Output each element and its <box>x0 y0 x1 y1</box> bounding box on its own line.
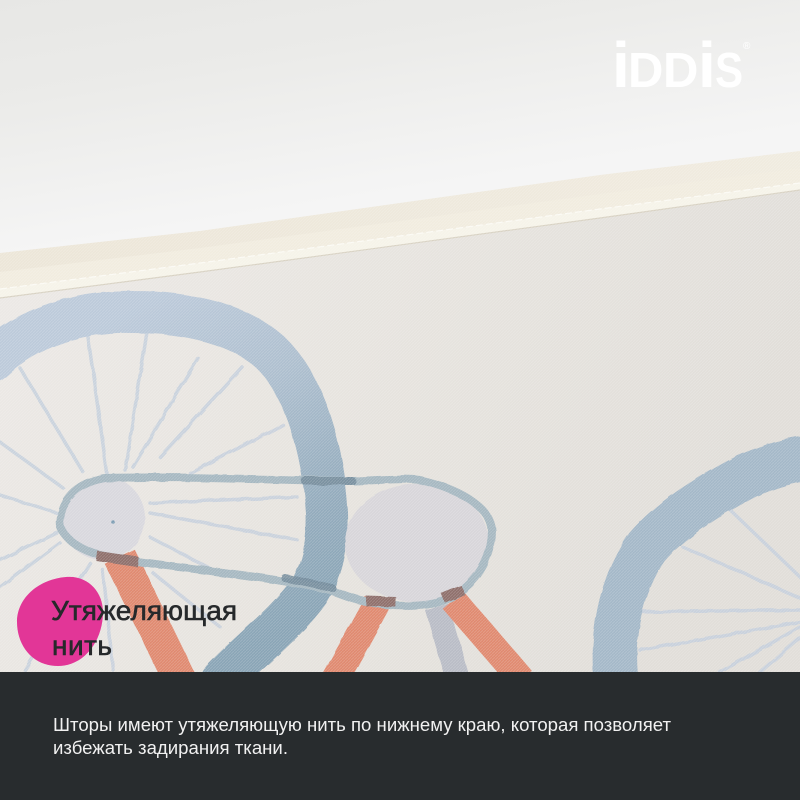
curtain hem <box>0 151 800 298</box>
description text: Шторы имеют утяжеляющую нить по нижнему краю, которая позволяет <box>53 714 672 735</box>
left wheel rim <box>0 312 327 680</box>
logo: iDDiS: D <box>628 44 663 98</box>
red frame tube, right <box>453 600 522 680</box>
pink blob accent <box>17 577 103 666</box>
curtain fabric <box>0 190 800 680</box>
label: weighted thread: Утяжеляющая <box>51 595 237 626</box>
dark overlaps <box>285 481 352 588</box>
front chainring <box>345 484 489 602</box>
description text <box>53 714 672 758</box>
logo: iDDiS: S <box>715 43 743 98</box>
logo: iDDiS: D <box>663 44 698 98</box>
left wheel spokes <box>0 332 297 670</box>
grey frame tube <box>437 607 458 680</box>
label: weighted thread <box>51 595 237 661</box>
fabric weave texture <box>0 151 800 672</box>
logo: iDDiS: i <box>698 29 716 101</box>
red frame tubes <box>120 557 377 680</box>
right wheel rim <box>615 458 800 680</box>
rear hub <box>61 476 145 560</box>
background above curtain <box>0 0 800 300</box>
logo: iDDiS <box>612 29 751 101</box>
bicycle illustration <box>0 312 800 680</box>
logo: iDDiS: ® <box>743 41 751 52</box>
chain <box>60 477 492 606</box>
label: weighted thread: нить <box>52 630 112 661</box>
description text: избежать задирания ткани. <box>53 737 288 758</box>
logo: iDDiS: i <box>612 29 630 101</box>
right wheel spokes <box>638 505 800 672</box>
bottom panel <box>0 672 800 800</box>
hub axle dot <box>111 520 115 524</box>
frame tube caps <box>97 556 463 602</box>
